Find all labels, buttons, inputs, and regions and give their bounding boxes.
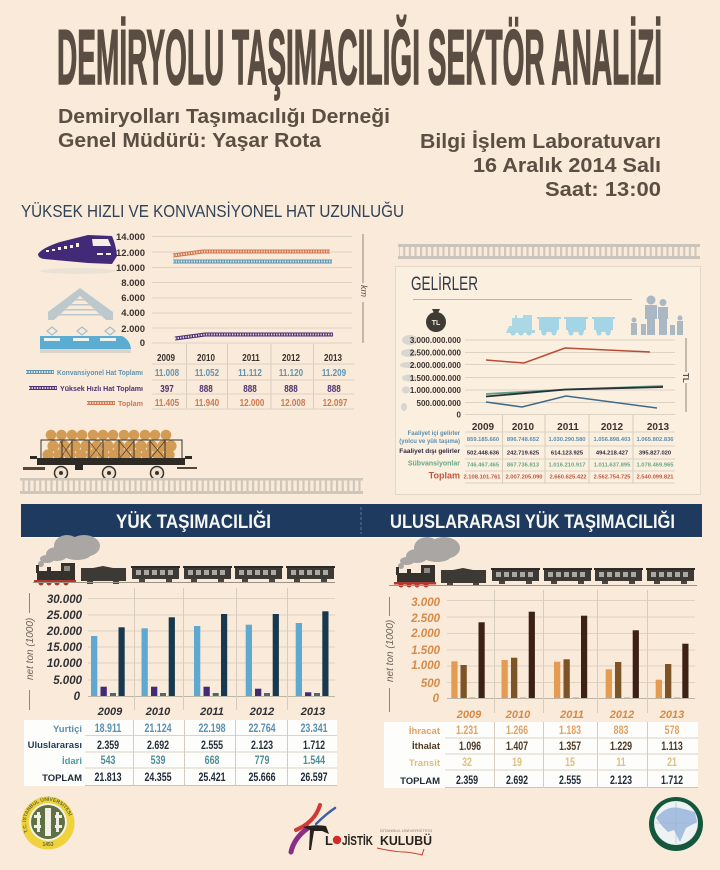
icon: track perspective — [48, 288, 113, 320]
chart: line length: 4.000 — [121, 308, 145, 319]
table: freight: 1.544 — [303, 755, 325, 767]
chart: line length: 14.000 — [116, 232, 145, 243]
icon: steam train left — [33, 535, 335, 586]
bars: 2013 — [296, 611, 328, 696]
legend: line length: Toplam — [118, 399, 143, 408]
table: freight: 25.421 — [199, 772, 226, 784]
table: revenues: 2011 — [557, 422, 579, 433]
chart: international freight bars: 2.500 — [410, 613, 441, 625]
table: line length: 397 — [160, 383, 174, 394]
icon: passengers — [631, 296, 683, 335]
chart: freight bars: 2013 — [300, 706, 325, 718]
table: international freight: 1.113 — [661, 741, 683, 753]
table: freight: 23.341 — [301, 723, 328, 735]
axis label: net ton left: net ton (1000) — [25, 618, 36, 680]
table: international freight: 1.407 — [506, 741, 528, 753]
chart: international freight bars: 2.000 — [410, 628, 441, 640]
chart: freight bars: 0 — [74, 691, 81, 703]
event info: Bilgi İşlem Laboratuvarı — [420, 130, 661, 153]
table: international freight: 1.096 — [459, 741, 481, 753]
chart: line length: 12.000 — [116, 248, 145, 259]
event info: Saat: 13:00 — [545, 178, 661, 201]
table: revenues: 2013 — [647, 422, 670, 433]
table: revenues: (yolcu ve yük taşıma) — [399, 439, 460, 445]
logo: Lojistik Kulübü: JİSTİK — [342, 833, 373, 848]
table: international freight: 21 — [667, 757, 677, 769]
table: line length: 11.209 — [322, 367, 346, 378]
table: revenues: 2010 — [512, 422, 535, 433]
bars: 2012 — [246, 614, 279, 696]
chart: line length — [116, 232, 369, 349]
logo: Istanbul University: 1453 — [42, 842, 54, 848]
table: international freight: 11 — [616, 757, 626, 769]
table: revenues: 1.065.802.836 — [636, 437, 674, 443]
table: revenues: Faaliyet dışı gelirler — [399, 448, 460, 455]
bars: 2012 — [606, 630, 639, 698]
legend: line length: Yüksek Hızlı Hat Toplamı — [60, 384, 143, 393]
chart: international freight bars: 2011 — [559, 709, 584, 721]
table: line length: 2010 — [197, 352, 215, 363]
chart: international freight bars: 2012 — [609, 709, 634, 721]
table: line length: 12.008 — [281, 397, 305, 408]
heading: line length: YÜKSEK HIZLI VE KONVANSİYONEL HAT UZUNLUĞU — [21, 200, 404, 221]
table: revenues: 395.827.020 — [639, 450, 671, 456]
table: international freight: Transit — [409, 758, 441, 769]
chart: revenues: 3.000.000.000 — [410, 336, 462, 345]
table: line length: 12.000 — [240, 397, 264, 408]
chart: freight bars: 25.000 — [46, 610, 83, 622]
table: international freight: İthalat — [412, 741, 441, 752]
chart: revenues — [410, 336, 690, 420]
table: revenues: 867.736.813 — [507, 462, 540, 468]
table: freight: 1.712 — [303, 740, 325, 752]
chart: freight bars: 30.000 — [47, 594, 83, 606]
speaker info: Genel Müdürü: Yaşar Rota — [58, 129, 322, 152]
chart: line length: 6.000 — [121, 293, 145, 304]
chart: international freight bars: 1.500 — [411, 645, 441, 657]
table: line length: 888 — [243, 383, 257, 394]
table: international freight: 883 — [614, 725, 629, 737]
table: international freight: 19 — [512, 757, 522, 769]
table: freight: 2.692 — [147, 740, 169, 752]
bars: 2009 — [91, 627, 125, 696]
icon: money bag — [426, 309, 446, 332]
speaker info — [58, 105, 390, 152]
table: international freight: 1.231 — [456, 725, 478, 737]
legend: line length — [26, 368, 143, 408]
table: revenues: 2012 — [601, 422, 624, 433]
icon: money bag: TL — [432, 320, 441, 327]
legend: line length: Konvansiyonel Hat Toplamı — [57, 368, 143, 377]
chart: freight bars: 2010 — [145, 706, 171, 718]
chart: revenues: 500.000.000 — [416, 399, 462, 408]
table: line length: 2013 — [324, 352, 342, 363]
table: revenues: 2009 — [472, 422, 495, 433]
banner: freight headings: ULUSLARARASI YÜK TAŞIMACILIĞI — [390, 511, 675, 533]
icon: high speed train — [38, 235, 117, 274]
table: freight: Uluslararası — [28, 740, 82, 751]
chart: freight bars: 2011 — [199, 706, 224, 718]
table: freight: İdari — [62, 756, 82, 767]
icon: blue commuter train — [40, 327, 131, 353]
chart: freight bars: 5.000 — [53, 675, 83, 687]
table: revenues: 1.011.637.895 — [594, 462, 631, 468]
chart: freight bars: 2012 — [249, 706, 274, 718]
chart: freight bars: 15.000 — [47, 642, 83, 654]
table: freight — [24, 720, 337, 786]
logo: Lojistik Kulübü: KULUBÜ — [380, 833, 432, 848]
table: revenues: 614.123.925 — [551, 450, 584, 456]
rail track: left — [20, 478, 363, 494]
table: revenues: 2.660.625.422 — [549, 474, 587, 480]
logo: Lojistik Kulübü — [291, 805, 432, 855]
axis label: km: km — [359, 285, 369, 298]
table: freight: 21.124 — [145, 723, 172, 735]
chart: international freight bars: 3.000 — [411, 597, 441, 609]
table: freight: TOPLAM — [42, 773, 82, 784]
axis label: net ton right — [385, 597, 396, 712]
logo: Transport Institute — [649, 797, 703, 851]
speaker info: Demiryolları Taşımacılığı Derneği — [58, 105, 390, 128]
chart: freight bars: 20.000 — [46, 626, 83, 638]
bars: 2009 — [451, 622, 485, 698]
table: revenues: 502.448.636 — [467, 450, 500, 456]
table: international freight — [384, 722, 698, 788]
table: line length: 11.405 — [155, 397, 179, 408]
table: international freight: 32 — [462, 757, 472, 769]
table: revenues: 1.016.210.917 — [548, 462, 586, 468]
table: line length: 2012 — [282, 352, 300, 363]
axis label: net ton right: net ton (1000) — [385, 620, 396, 682]
table: freight: Yurtiçi — [53, 724, 82, 735]
table: international freight: 2.555 — [559, 775, 581, 787]
panel: revenues — [396, 266, 700, 494]
table: revenues: 746.467.465 — [467, 462, 500, 468]
table: revenues: 859.185.660 — [467, 437, 499, 443]
table: line length: 11.940 — [195, 397, 219, 408]
icon: blue steam train — [506, 315, 615, 336]
chart: line length: 2.000 — [121, 324, 145, 335]
table: line length: 11.008 — [155, 367, 179, 378]
table: freight: 539 — [151, 755, 166, 767]
table: revenues: 494.218.427 — [596, 450, 628, 456]
table: freight: 21.813 — [95, 772, 122, 784]
table: international freight: 1.357 — [559, 741, 581, 753]
table: revenues — [399, 415, 675, 484]
icon: steam train right — [389, 537, 697, 588]
table: freight: 25.666 — [249, 772, 276, 784]
table: revenues: 242.719.625 — [507, 450, 540, 456]
table: international freight: 15 — [565, 757, 575, 769]
table: freight: 24.355 — [145, 772, 172, 784]
table: revenues: 2.540.099.821 — [636, 474, 674, 480]
chart: line length: 8.000 — [121, 278, 145, 289]
logo: Istanbul University: T.C. İSTANBUL ÜNİVERSİTESİ — [22, 796, 73, 834]
banner: freight headings — [21, 504, 702, 538]
bars: 2013 — [656, 644, 688, 698]
table: freight: 668 — [205, 755, 220, 767]
logo: Lojistik Kulübü: İSTANBUL ÜNİVERSİTESİ — [380, 828, 432, 833]
chart: revenues: 1.500.000.000 — [410, 374, 462, 383]
rail track: right — [398, 244, 700, 259]
bars: 2011 — [554, 616, 587, 698]
table: international freight: 1.229 — [610, 741, 632, 753]
event info — [420, 130, 661, 201]
bars: 2010 — [142, 617, 175, 696]
chart: freight bars: 2009 — [97, 706, 123, 718]
table: freight: 22.764 — [249, 723, 276, 735]
table: international freight: 1.712 — [661, 775, 683, 787]
table: international freight: 2.692 — [506, 775, 528, 787]
table: revenues: Toplam — [429, 470, 460, 480]
table: revenues: 1.078.469.965 — [636, 462, 674, 468]
table: revenues: Sübvansiyonlar — [408, 460, 460, 468]
table: international freight: 1.183 — [559, 725, 581, 737]
table: freight: 26.597 — [301, 772, 328, 784]
table: freight: 22.198 — [199, 723, 226, 735]
table: line length: 2011 — [242, 352, 260, 363]
icon: log wagon — [23, 430, 197, 480]
chart: international freight bars: 2013 — [659, 709, 684, 721]
chart: revenues: 1.000.000.000 — [410, 386, 462, 395]
table: revenues: 2.562.754.725 — [593, 474, 631, 480]
heading: revenues: GELİRLER — [411, 274, 478, 295]
bars: 2010 — [502, 612, 535, 698]
table: freight: 2.123 — [251, 740, 273, 752]
table: freight: 18.911 — [95, 723, 122, 735]
logo: Lojistik Kulübü: L — [325, 833, 333, 848]
table: line length: 12.097 — [323, 397, 347, 408]
axis label: km — [359, 234, 369, 343]
table: international freight: 2.359 — [456, 775, 478, 787]
table: international freight: TOPLAM — [400, 776, 440, 787]
table: line length: 888 — [199, 383, 213, 394]
chart: international freight bars: 0 — [433, 693, 440, 705]
table: freight: 543 — [101, 755, 116, 767]
table: international freight: 578 — [665, 725, 680, 737]
chart: revenues: 0 — [457, 410, 462, 420]
chart: line length: 0 — [140, 338, 145, 349]
table: international freight: 2.123 — [610, 775, 632, 787]
table: revenues: 2.108.101.761 — [463, 474, 501, 480]
axis label: TL — [681, 338, 690, 412]
table: freight: 2.555 — [201, 740, 223, 752]
table: revenues: 2.007.205.090 — [505, 474, 543, 480]
table: line length: 11.120 — [279, 367, 303, 378]
logo: Istanbul University — [22, 796, 74, 850]
chart: international freight bars: 500 — [421, 678, 441, 690]
chart: revenues: 2.500.000.000 — [410, 348, 462, 358]
axis label: TL: TL — [681, 373, 690, 383]
chart: international freight bars: 2010 — [505, 709, 531, 721]
table: revenues: Faaliyet içi gelirler — [408, 431, 461, 437]
chart: freight bars — [25, 588, 335, 718]
table: freight: 779 — [255, 755, 270, 767]
table: international freight: 1.266 — [506, 725, 528, 737]
table: revenues: 896.748.652 — [507, 437, 539, 443]
chart: freight bars: 10.000 — [47, 658, 83, 670]
event info: 16 Aralık 2014 Salı — [473, 154, 661, 177]
axis label: net ton left — [25, 593, 36, 710]
chart: international freight bars: 2009 — [456, 709, 482, 721]
table: line length: 11.112 — [238, 367, 262, 378]
icon: coin piles — [400, 335, 418, 411]
table: international freight: İhracat — [409, 726, 441, 737]
table: line length — [152, 344, 354, 409]
table: revenues: 1.056.898.403 — [593, 437, 631, 443]
table: line length: 888 — [284, 383, 298, 394]
table: line length: 2009 — [157, 352, 175, 363]
chart: international freight bars — [385, 590, 695, 721]
table: line length: 11.052 — [195, 367, 219, 378]
chart: line length: 10.000 — [116, 263, 145, 274]
chart: revenues: 2.000.000.000 — [410, 361, 462, 370]
table: line length: 888 — [327, 383, 341, 394]
table: freight: 2.359 — [97, 740, 119, 752]
banner: freight headings: YÜK TAŞIMACILIĞI — [116, 511, 271, 533]
chart: international freight bars: 1.000 — [411, 660, 441, 672]
bars: 2011 — [194, 614, 227, 696]
table: revenues: 1.030.290.580 — [548, 437, 586, 443]
